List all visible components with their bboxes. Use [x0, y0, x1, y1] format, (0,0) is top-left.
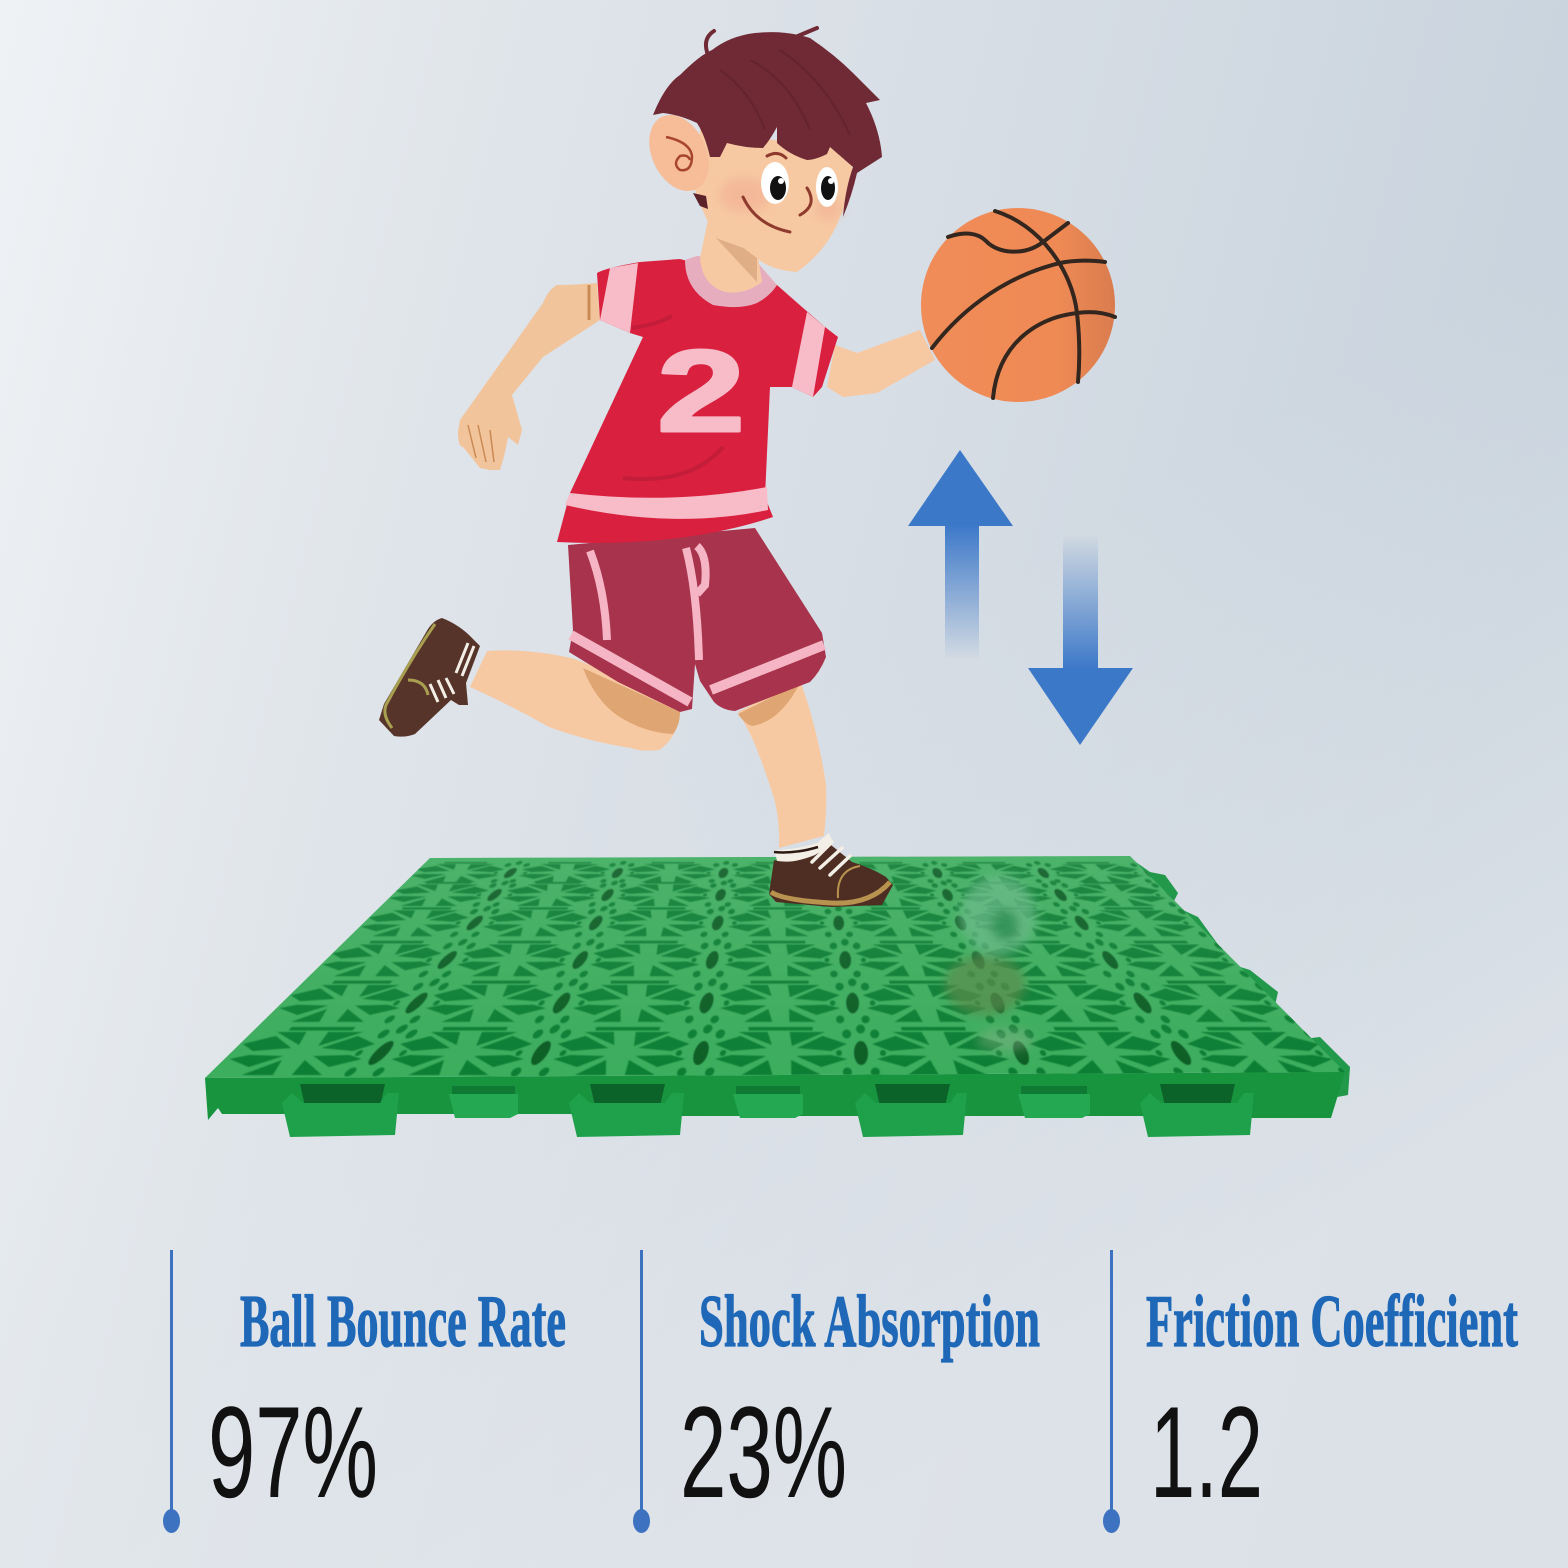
arrow: up [908, 450, 1013, 660]
jersey stripe [565, 487, 768, 519]
front leg and shoe [738, 680, 893, 907]
interlocking clips [282, 1084, 1254, 1137]
value: 97% [208, 1379, 378, 1525]
sleeve cuffs [600, 263, 638, 333]
basketball [921, 208, 1115, 402]
hair [653, 32, 882, 217]
label: Shock Absorption [699, 1281, 1040, 1363]
blurred ball ghost on tile [945, 875, 1036, 1052]
eyes [761, 162, 789, 204]
marker line [163, 1250, 180, 1533]
value: 1.2 [1150, 1379, 1263, 1525]
value: 23% [680, 1379, 847, 1525]
marker line [633, 1250, 650, 1533]
brows, nose and mouth [743, 153, 811, 232]
tile top surface [205, 856, 1345, 1078]
face [695, 130, 853, 272]
label: Ball Bounce Rate [240, 1281, 566, 1363]
arrow: down [1028, 535, 1133, 745]
shorts [568, 528, 826, 712]
back leg and shoe [379, 618, 680, 751]
jersey number: 2 [657, 326, 745, 456]
marker line [1103, 1250, 1120, 1533]
tile side tabs [1130, 858, 1350, 1098]
collar [685, 256, 777, 307]
stat: shock absorption [633, 1250, 1040, 1533]
jersey [557, 256, 838, 543]
ear [638, 105, 720, 201]
stat: ball bounce rate [163, 1250, 566, 1533]
green sports floor tile [205, 856, 1387, 1137]
boy dribbling basketball [379, 28, 935, 907]
lattice holes [205, 856, 1387, 1078]
neck [700, 220, 762, 293]
stat: friction coefficient [1103, 1250, 1518, 1533]
left arm and hand [458, 283, 600, 470]
right arm and hand [827, 330, 935, 397]
head [638, 28, 882, 272]
tile front face [205, 1072, 1345, 1120]
